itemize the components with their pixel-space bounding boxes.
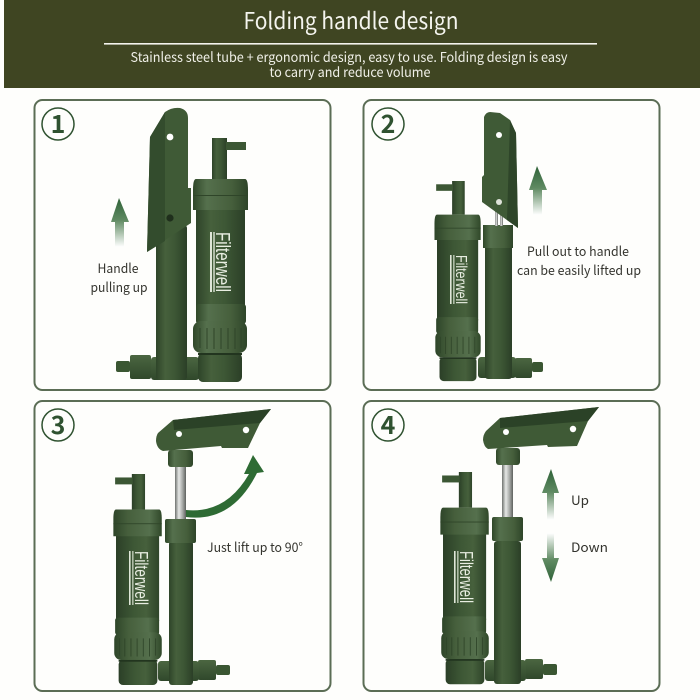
panel 2: pull out handle (364, 100, 660, 390)
step badge 1: 1 (51, 105, 65, 141)
subtitle: to carry and reduce volume (270, 61, 430, 81)
panel 3: lift up to 90 degrees (34, 401, 330, 691)
arrow: up (529, 166, 547, 215)
title: Folding handle design (244, 2, 458, 36)
label: handle pulling up: pulling up (90, 277, 148, 296)
product: water filter pumping (440, 407, 599, 684)
brand label: Filterwell (452, 255, 469, 304)
arrow: up (542, 469, 559, 520)
product: water filter with handle pulled out (434, 112, 543, 381)
label: pull out to handle: Pull out to handle (527, 241, 629, 260)
step badge 1 (42, 105, 74, 141)
arrow: up (111, 198, 129, 247)
brand label: Filterwell (211, 232, 233, 292)
brand label: Filterwell (456, 551, 476, 603)
step badge 2 (372, 105, 404, 141)
arrow: curved lift (186, 455, 264, 518)
step badge 4 (372, 406, 404, 442)
label: up: Up (571, 490, 589, 509)
subtitle: Stainless steel tube + ergonomic design, easy to use. Folding design is easy (130, 46, 568, 66)
arrow: down (542, 533, 559, 582)
step badge 3: 3 (51, 406, 65, 442)
header banner (4, 0, 700, 88)
label: just lift up to 90 degrees: Just lift up to 90° (207, 537, 303, 556)
panel 1: handle pulling up (34, 100, 330, 390)
label: pull out to handle: can be easily lifted up (517, 260, 641, 279)
brand label: Filterwell (131, 551, 151, 605)
product: water filter with handle at 90 degrees (113, 409, 271, 685)
step badge 4: 4 (381, 406, 396, 442)
label: handle pulling up: Handle (98, 258, 138, 277)
step badge 2: 2 (381, 105, 395, 141)
label: down: Down (571, 537, 608, 556)
panel 4: up and down pumping (364, 401, 660, 691)
step badge 3 (42, 406, 74, 442)
product: water filter with handle folded (116, 108, 248, 382)
